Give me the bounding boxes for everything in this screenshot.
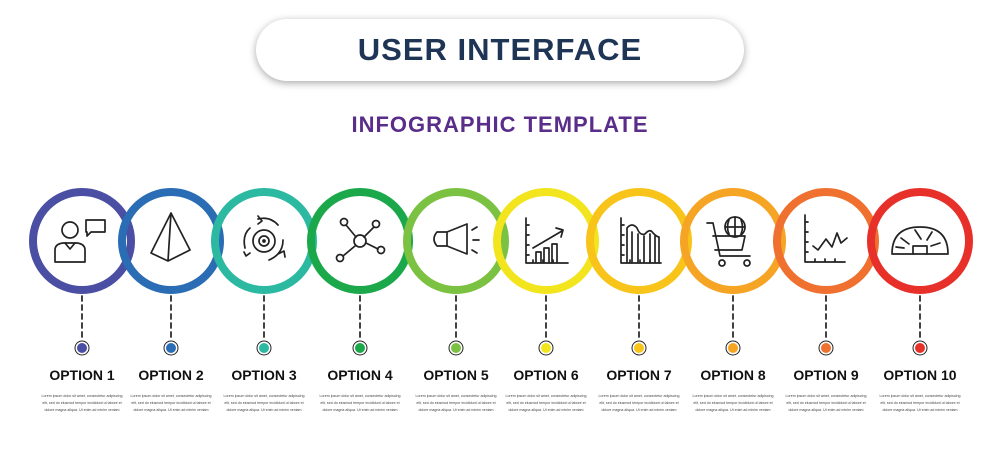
label 5: OPTION 5 xyxy=(423,367,489,383)
option 2 circle and connector xyxy=(122,192,220,355)
text 2: Lorem ipsum dolor sit amet, consectetur adipiscing elit, sed do eiusmod tempor incididunt ut labore et dolore magna aliqua. Ut enim ad minim veniam xyxy=(131,394,211,412)
text 9: Lorem ipsum dolor sit amet, consectetur adipiscing elit, sed do eiusmod tempor incididunt ut labore et dolore magna aliqua. Ut enim ad minim veniam xyxy=(786,394,866,412)
subtitle: INFOGRAPHIC TEMPLATE xyxy=(351,112,649,137)
option 9 circle and connector xyxy=(777,192,875,355)
text 7: Lorem ipsum dolor sit amet, consectetur adipiscing elit, sed do eiusmod tempor incididunt ut labore et dolore magna aliqua. Ut enim ad minim veniam xyxy=(599,394,679,412)
label 9: OPTION 9 xyxy=(793,367,859,383)
icon: area chart xyxy=(621,218,661,263)
option 4 circle and connector xyxy=(311,192,409,355)
icon: igloo dome xyxy=(892,227,948,254)
text 3: Lorem ipsum dolor sit amet, consectetur adipiscing elit, sed do eiusmod tempor incididunt ut labore et dolore magna aliqua. Ut enim ad minim veniam xyxy=(224,394,304,412)
text 10: Lorem ipsum dolor sit amet, consectetur adipiscing elit, sed do eiusmod tempor incididunt ut labore et dolore magna aliqua. Ut enim ad minim veniam xyxy=(880,394,960,412)
text 6: Lorem ipsum dolor sit amet, consectetur adipiscing elit, sed do eiusmod tempor incididunt ut labore et dolore magna aliqua. Ut enim ad minim veniam xyxy=(506,394,586,412)
icon: megaphone xyxy=(434,224,479,254)
option labels xyxy=(49,367,957,383)
icon: growth chart xyxy=(526,218,568,263)
icon: line chart xyxy=(805,215,847,262)
label 1: OPTION 1 xyxy=(49,367,115,383)
label 8: OPTION 8 xyxy=(700,367,766,383)
text 1: Lorem ipsum dolor sit amet, consectetur adipiscing elit, sed do eiusmod tempor incididunt ut labore et dolore magna aliqua. Ut enim ad minim veniam xyxy=(42,394,122,412)
icon: network hub xyxy=(336,218,384,262)
label 4: OPTION 4 xyxy=(327,367,393,383)
title: USER INTERFACE xyxy=(358,32,642,67)
option 3 circle and connector xyxy=(215,192,313,355)
label 10: OPTION 10 xyxy=(883,367,957,383)
label 6: OPTION 6 xyxy=(513,367,579,383)
option 1 circle and connector xyxy=(33,192,131,355)
option 5 circle and connector xyxy=(407,192,505,355)
text 5: Lorem ipsum dolor sit amet, consectetur adipiscing elit, sed do eiusmod tempor incididunt ut labore et dolore magna aliqua. Ut enim ad minim veniam xyxy=(416,394,496,412)
label 2: OPTION 2 xyxy=(138,367,204,383)
icon: pyramid xyxy=(151,213,190,261)
text 8: Lorem ipsum dolor sit amet, consectetur adipiscing elit, sed do eiusmod tempor incididunt ut labore et dolore magna aliqua. Ut enim ad minim veniam xyxy=(693,394,773,412)
option 7 circle and connector xyxy=(590,192,688,355)
icon: user with speech bubble xyxy=(55,220,105,262)
option 6 circle and connector xyxy=(497,192,595,355)
option 8 circle and connector xyxy=(684,192,782,355)
text 4: Lorem ipsum dolor sit amet, consectetur adipiscing elit, sed do eiusmod tempor incididunt ut labore et dolore magna aliqua. Ut enim ad minim veniam xyxy=(320,394,400,412)
title xyxy=(256,19,744,81)
icon: shopping cart with globe xyxy=(707,217,750,266)
label 7: OPTION 7 xyxy=(606,367,672,383)
option 10 circle and connector xyxy=(871,192,969,355)
description texts xyxy=(42,394,960,412)
label 3: OPTION 3 xyxy=(231,367,297,383)
icon: rotation disc xyxy=(244,216,285,260)
